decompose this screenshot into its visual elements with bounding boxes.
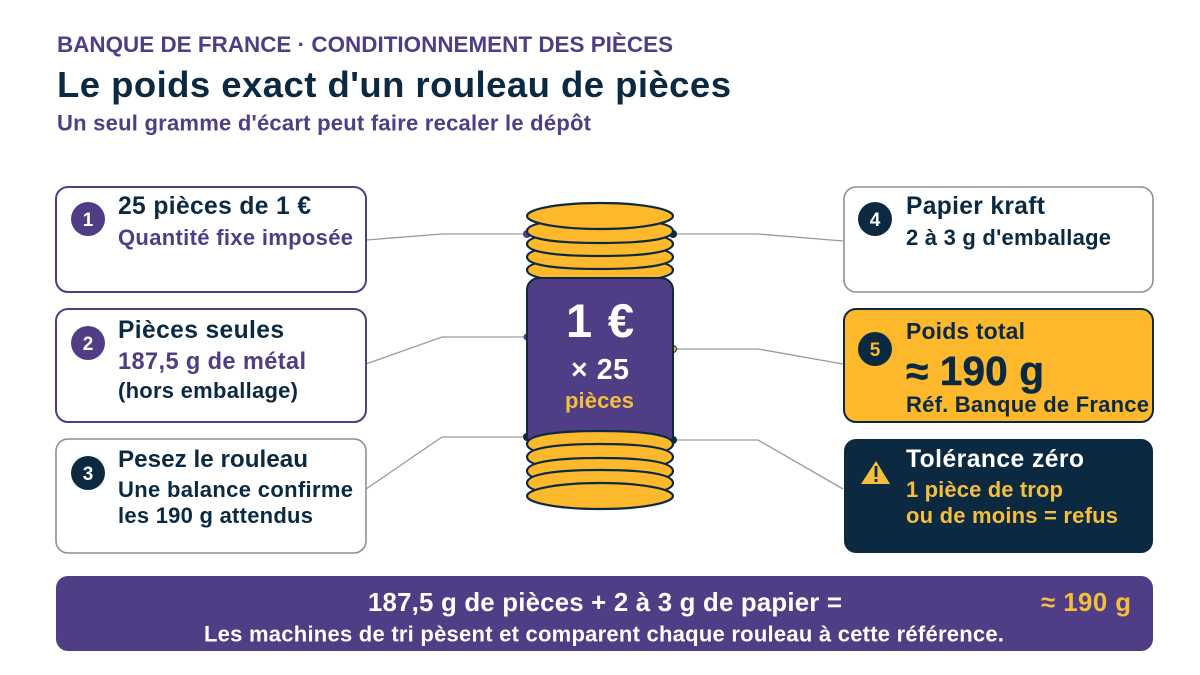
card 3 heading: Pesez le rouleau [118, 446, 308, 473]
icon: number 4: 4 [870, 210, 881, 231]
icon: number 1 [71, 202, 105, 236]
icon: number 2 [71, 326, 105, 360]
connector lines [366, 234, 843, 489]
tolerance heading: Tolérance zéro [906, 446, 1084, 473]
card 2 heading: Pièces seules [118, 317, 284, 344]
panel: zero tolerance [844, 439, 1153, 553]
panel: card 2 [56, 309, 366, 422]
chart: coin roll [527, 203, 673, 509]
roll label [565, 294, 634, 413]
panel: card 5 total weight [844, 309, 1153, 422]
panel: card 4 [844, 187, 1153, 292]
panel: card 1 [56, 187, 366, 292]
banner note: Les machines de tri pèsent et comparent chaque rouleau à cette référence. [204, 622, 1004, 646]
card 4 text: 2 à 3 g d'emballage [906, 225, 1111, 250]
panel: zero tolerance: ou de moins = refus [906, 503, 1118, 528]
subtitle: Un seul gramme d'écart peut faire recaler le dépôt [57, 110, 592, 136]
top coins [527, 203, 673, 282]
icon: warning triangle [861, 461, 890, 484]
banner equation: 187,5 g de pièces + 2 à 3 g de papier = [368, 589, 842, 617]
coin roll wrapper [527, 278, 673, 448]
card 3 text: Une balance confirme [118, 477, 353, 502]
card 2 value: 187,5 g de métal [118, 349, 306, 375]
eyebrow heading: BANQUE DE FRANCE · CONDITIONNEMENT DES PIÈCES [57, 32, 673, 57]
roll label: × 25 [571, 354, 629, 386]
card 2 note: (hors emballage) [118, 378, 298, 403]
card 5 value: ≈ 190 g [906, 348, 1044, 394]
icon: number 4 [858, 202, 892, 236]
bottom coins [527, 431, 673, 509]
title: Le poids exact d'un rouleau de pièces [57, 64, 731, 105]
tolerance text: 1 pièce de trop [906, 477, 1063, 502]
icon: number 2: 2 [83, 334, 93, 355]
icon: number 5 [858, 332, 892, 366]
icon: number 3 [71, 456, 105, 490]
icon: number 1: 1 [83, 210, 94, 231]
card 1 text: Quantité fixe imposée [118, 225, 353, 250]
panel: summary banner [56, 576, 1153, 651]
card 1 heading: 25 pièces de 1 € [118, 193, 311, 220]
roll label: pièces [565, 388, 634, 413]
card 5 heading: Poids total [906, 318, 1025, 344]
banner result: ≈ 190 g [1041, 589, 1131, 617]
card 4 heading: Papier kraft [906, 193, 1045, 220]
panel: card 3: les 190 g attendus [118, 503, 313, 528]
icon: number 3: 3 [83, 464, 93, 485]
icon: number 5: 5 [870, 340, 881, 361]
connector anchor dots [523, 230, 677, 444]
panel: card 3 [56, 439, 366, 553]
card 5 reference: Réf. Banque de France [906, 392, 1149, 417]
roll label: 1 € [566, 294, 634, 347]
